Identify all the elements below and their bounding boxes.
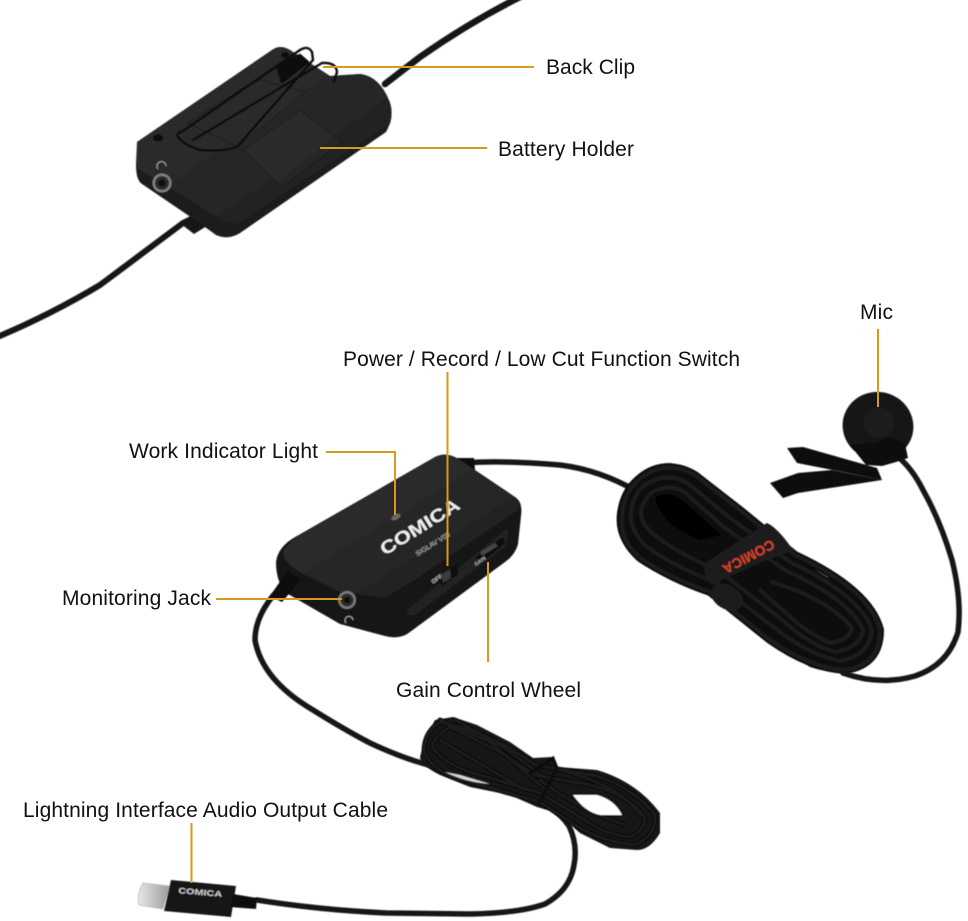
product: lavalier microphone with clip <box>770 384 959 680</box>
callout: Work Indicator Light: Work Indicator Light <box>129 440 318 463</box>
callout: Lightning Interface Audio Output Cable: Lightning Interface Audio Output Cable <box>23 799 388 822</box>
monitoring jack with headphone mark <box>338 591 356 623</box>
callout: Battery Holder: Battery Holder <box>498 138 634 161</box>
callout: Work Indicator Light <box>129 440 395 515</box>
foam windscreen <box>835 384 921 468</box>
recessed side panel <box>407 530 508 615</box>
back unit body <box>136 47 392 237</box>
callout: Gain Control Wheel: Gain Control Wheel <box>396 679 581 702</box>
callout: Monitoring Jack: Monitoring Jack <box>62 587 212 610</box>
product: front of control unit <box>255 455 636 914</box>
strap logo: COMICA <box>720 536 778 577</box>
logo: COMICA: COMICA <box>376 495 463 559</box>
mic cable <box>843 456 959 680</box>
product: lightning connector and small coil <box>138 717 660 917</box>
unit top face <box>283 455 519 598</box>
mic capsule holder <box>850 436 908 466</box>
product: back of control unit with cables <box>0 0 522 338</box>
work indicator LED <box>390 512 402 522</box>
function switch: OFF <box>431 574 444 586</box>
velcro strap <box>704 523 793 585</box>
product: coiled microphone cable with strap <box>617 463 883 673</box>
connector silver tip <box>138 883 170 909</box>
callout: Mic <box>860 301 893 407</box>
function switch <box>431 564 458 586</box>
back unit top face <box>137 47 392 224</box>
tie clip <box>770 447 882 498</box>
strap underside <box>706 578 748 616</box>
cable: to lightning connector <box>255 590 575 914</box>
callout: Back Clip: Back Clip <box>546 56 635 79</box>
cable connectors <box>270 570 301 602</box>
cable: to coiled mic lead <box>465 462 636 491</box>
callout: Power / Record / Low Cut Function Switch: Power / Record / Low Cut Function Switch <box>343 348 740 371</box>
small cable coil <box>420 717 660 850</box>
back clip wire <box>178 48 337 151</box>
battery holder door <box>243 110 342 187</box>
screw holes <box>153 52 289 142</box>
cable: lower left cable of back unit <box>0 212 205 338</box>
coil silhouette <box>617 463 883 673</box>
unit body <box>276 455 521 637</box>
cable: upper right cable of back unit <box>385 0 522 84</box>
audio jack with headphone mark <box>152 162 172 192</box>
clip mounting plate <box>188 80 305 147</box>
cable strain relief <box>181 205 218 234</box>
coil inner dark gap <box>655 494 722 540</box>
connector housing <box>164 880 236 917</box>
gain control wheel: GAIN <box>474 555 488 568</box>
coil strands <box>622 468 880 670</box>
connector neck <box>230 894 257 909</box>
gain control wheel <box>474 537 505 568</box>
callout: Mic: Mic <box>860 301 893 324</box>
connector logo: COMICA <box>178 886 223 899</box>
model label: SIGLAV V03 <box>415 531 452 558</box>
